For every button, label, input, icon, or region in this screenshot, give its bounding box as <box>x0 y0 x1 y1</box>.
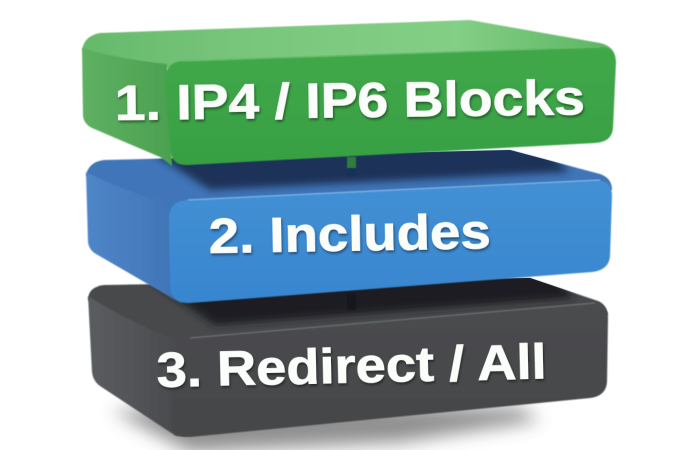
green block highlight edge <box>183 47 600 61</box>
green block front face <box>165 47 616 165</box>
connector: blue to dark <box>347 294 356 310</box>
blue block top face <box>86 150 612 215</box>
blue block left face <box>86 172 182 303</box>
dark block highlight edge <box>190 303 595 338</box>
connector: green to blue <box>347 157 356 177</box>
blue block front face <box>169 180 612 303</box>
dark block top face <box>88 278 608 350</box>
dark block left face <box>88 296 186 437</box>
blue block highlight edge <box>188 180 600 200</box>
blue block cast shadow <box>151 150 572 195</box>
ground shadow <box>112 405 540 450</box>
label 1: 1. IP4 / IP6 Blocks <box>114 71 585 131</box>
dark block cast shadow <box>158 278 577 329</box>
block 3: Redirect / All <box>88 268 608 437</box>
label 3: 3. Redirect / All <box>156 335 547 398</box>
block 1: IP4 / IP6 Blocks <box>82 20 616 166</box>
label 2: 2. Includes <box>208 205 491 264</box>
green block left face <box>82 48 172 166</box>
block 2: Includes <box>86 135 612 310</box>
stacked layers infographic <box>81 19 617 450</box>
dark block front face <box>171 303 608 437</box>
green block top face <box>82 20 615 68</box>
